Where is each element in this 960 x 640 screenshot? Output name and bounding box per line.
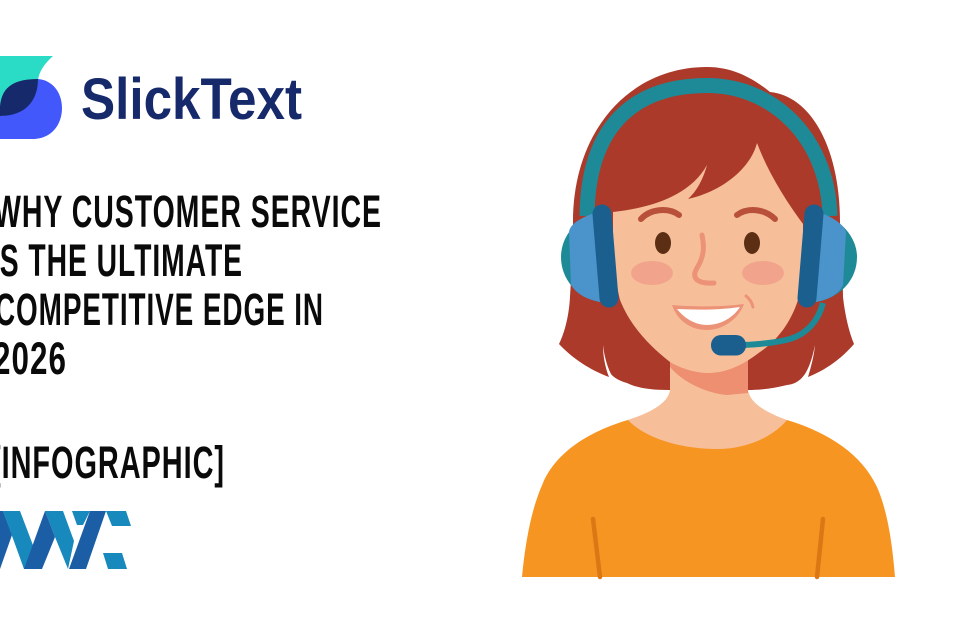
microphone <box>711 303 823 356</box>
title: IS THE ULTIMATE <box>0 235 243 286</box>
title <box>0 186 382 488</box>
right ear cup <box>807 212 857 302</box>
shirt <box>522 420 895 577</box>
face <box>613 130 803 373</box>
illustration: customer service agent <box>522 67 895 577</box>
neck and chest <box>628 355 787 450</box>
eyebrows <box>641 210 775 219</box>
icon: SlickText mark <box>0 56 62 139</box>
neck shadow <box>670 360 748 395</box>
eyes <box>655 232 760 254</box>
nose <box>695 235 714 283</box>
title: [INFOGRAPHIC] <box>0 437 225 488</box>
headband <box>587 86 830 216</box>
smile <box>672 296 753 330</box>
shirt seams <box>593 519 823 577</box>
title: WHY CUSTOMER SERVICE <box>0 186 382 237</box>
left ear cup <box>561 212 609 302</box>
hair back <box>559 67 854 390</box>
hair fringe <box>586 88 832 228</box>
title: COMPETITIVE EDGE IN <box>0 284 324 335</box>
wordmark: SlickText: SlickText <box>81 67 302 132</box>
SlickText logo <box>0 56 302 139</box>
cheeks <box>631 261 784 285</box>
MWT logo <box>0 511 131 569</box>
